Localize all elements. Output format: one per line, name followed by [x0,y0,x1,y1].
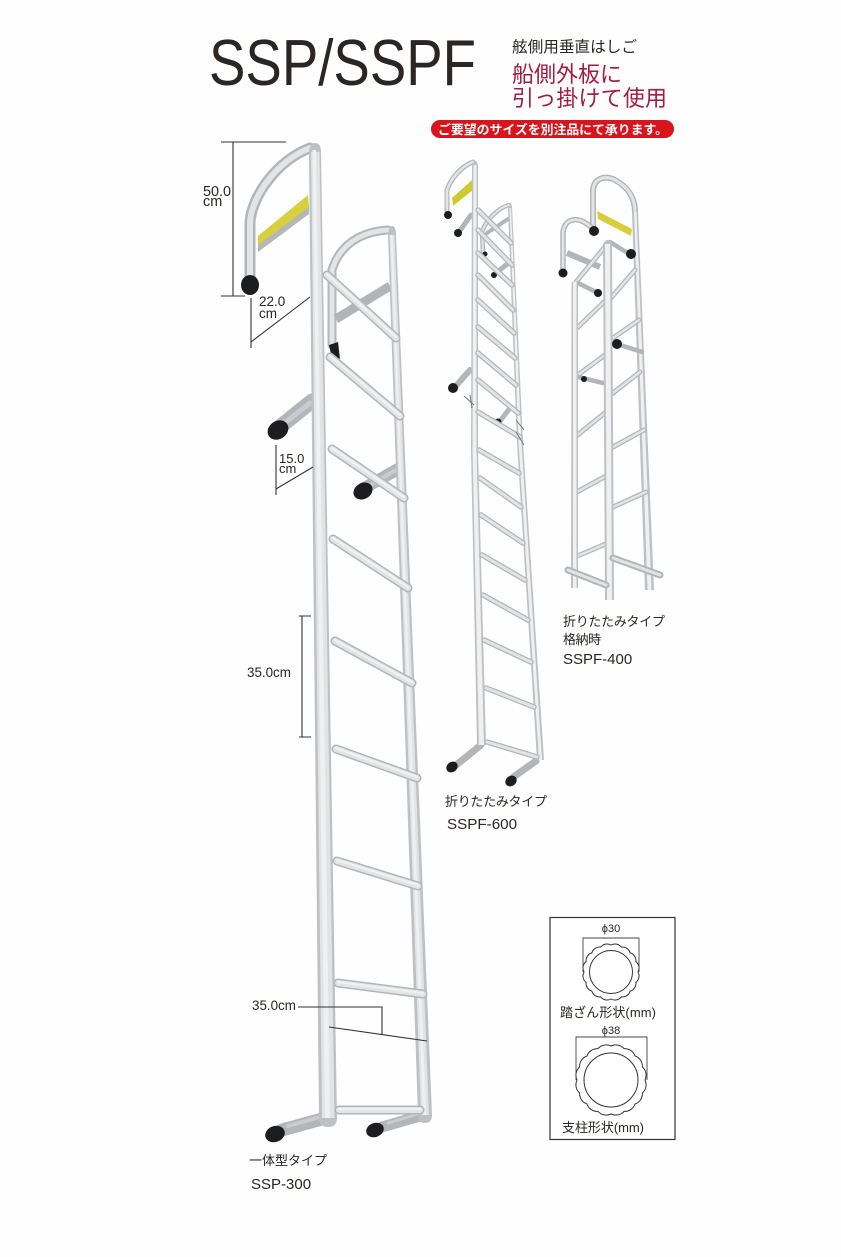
label: SSP-300: 一体型タイプ [249,1153,327,1168]
red headline: 船側外板に [512,62,622,87]
ladder: SSPF-600 folding type [444,161,544,789]
black foot caps [444,211,519,789]
label: SSPF-400 [563,614,665,668]
rung cross-section: 踏ざん形状(mm) [560,1005,656,1020]
label: SSP-300 [249,1153,327,1193]
dimension: 22.0 cm: cm [259,306,277,321]
dimension: 35.0 cm width: 35.0cm [252,998,296,1013]
title: SSP/SSPF [209,26,476,99]
dimension: 22.0 cm: 22.0 [259,294,285,309]
rung cross-section [560,923,656,1020]
ladder: SSPF-400 folded [558,178,660,600]
dimension: 15.0 cm [276,445,313,495]
label: SSPF-600: 折りたたみタイプ [445,794,547,809]
rungs [478,210,537,757]
hinge hardware [464,395,524,445]
dimension: 50.0 cm: 50.0 [203,184,231,200]
red headline [512,62,667,111]
right rail [388,226,432,1123]
rungs [327,274,423,1110]
post cross-section: 支柱形状(mm) [562,1120,644,1135]
label: SSPF-400: 折りたたみタイプ [563,614,665,629]
label: SSPF-600 [445,794,547,833]
dimension: 35.0 cm rung spacing [247,616,311,737]
dimension: 22.0 cm [251,294,310,348]
left rail [309,143,337,1127]
front hook with yellow plate [241,148,310,295]
rear hooks and bars [563,178,654,590]
post cross-section: ϕ38 [602,1025,620,1037]
dimension: 50.0 cm [203,142,286,296]
label: SSP-300: SSP-300 [251,1176,311,1193]
rails [471,161,544,760]
rungs and legs [571,242,646,588]
dimension: 50.0 cm: cm [203,194,222,210]
black foot caps [558,226,636,382]
dimension: 15.0 cm: cm [279,461,296,476]
ladder: SSP-300 one-piece type [241,143,432,1145]
rear hook and struts [281,230,420,1130]
base bars [568,558,660,585]
dimension: 35.0 cm width [252,998,427,1041]
red headline: 引っ掛けて使用 [512,86,667,111]
panel: cross-section shapes [550,918,675,1140]
centre rail [603,240,614,600]
red pill notice: ご要望のサイズを別注品にて承ります。 [438,122,668,137]
dimension: 15.0 cm: 15.0 [279,451,304,466]
label: SSPF-400: SSPF-400 [563,651,632,668]
dimension: 35.0 cm rung spacing: 35.0cm [247,665,291,680]
subtitle: 舷側用垂直はしご [512,38,637,56]
label: SSPF-600: SSPF-600 [447,816,517,833]
post cross-section [562,1025,647,1135]
hooks and legs [447,162,536,778]
black foot caps [263,416,386,1145]
label: SSPF-400: 格納時 [563,632,601,647]
rung cross-section: ϕ30 [602,923,620,935]
